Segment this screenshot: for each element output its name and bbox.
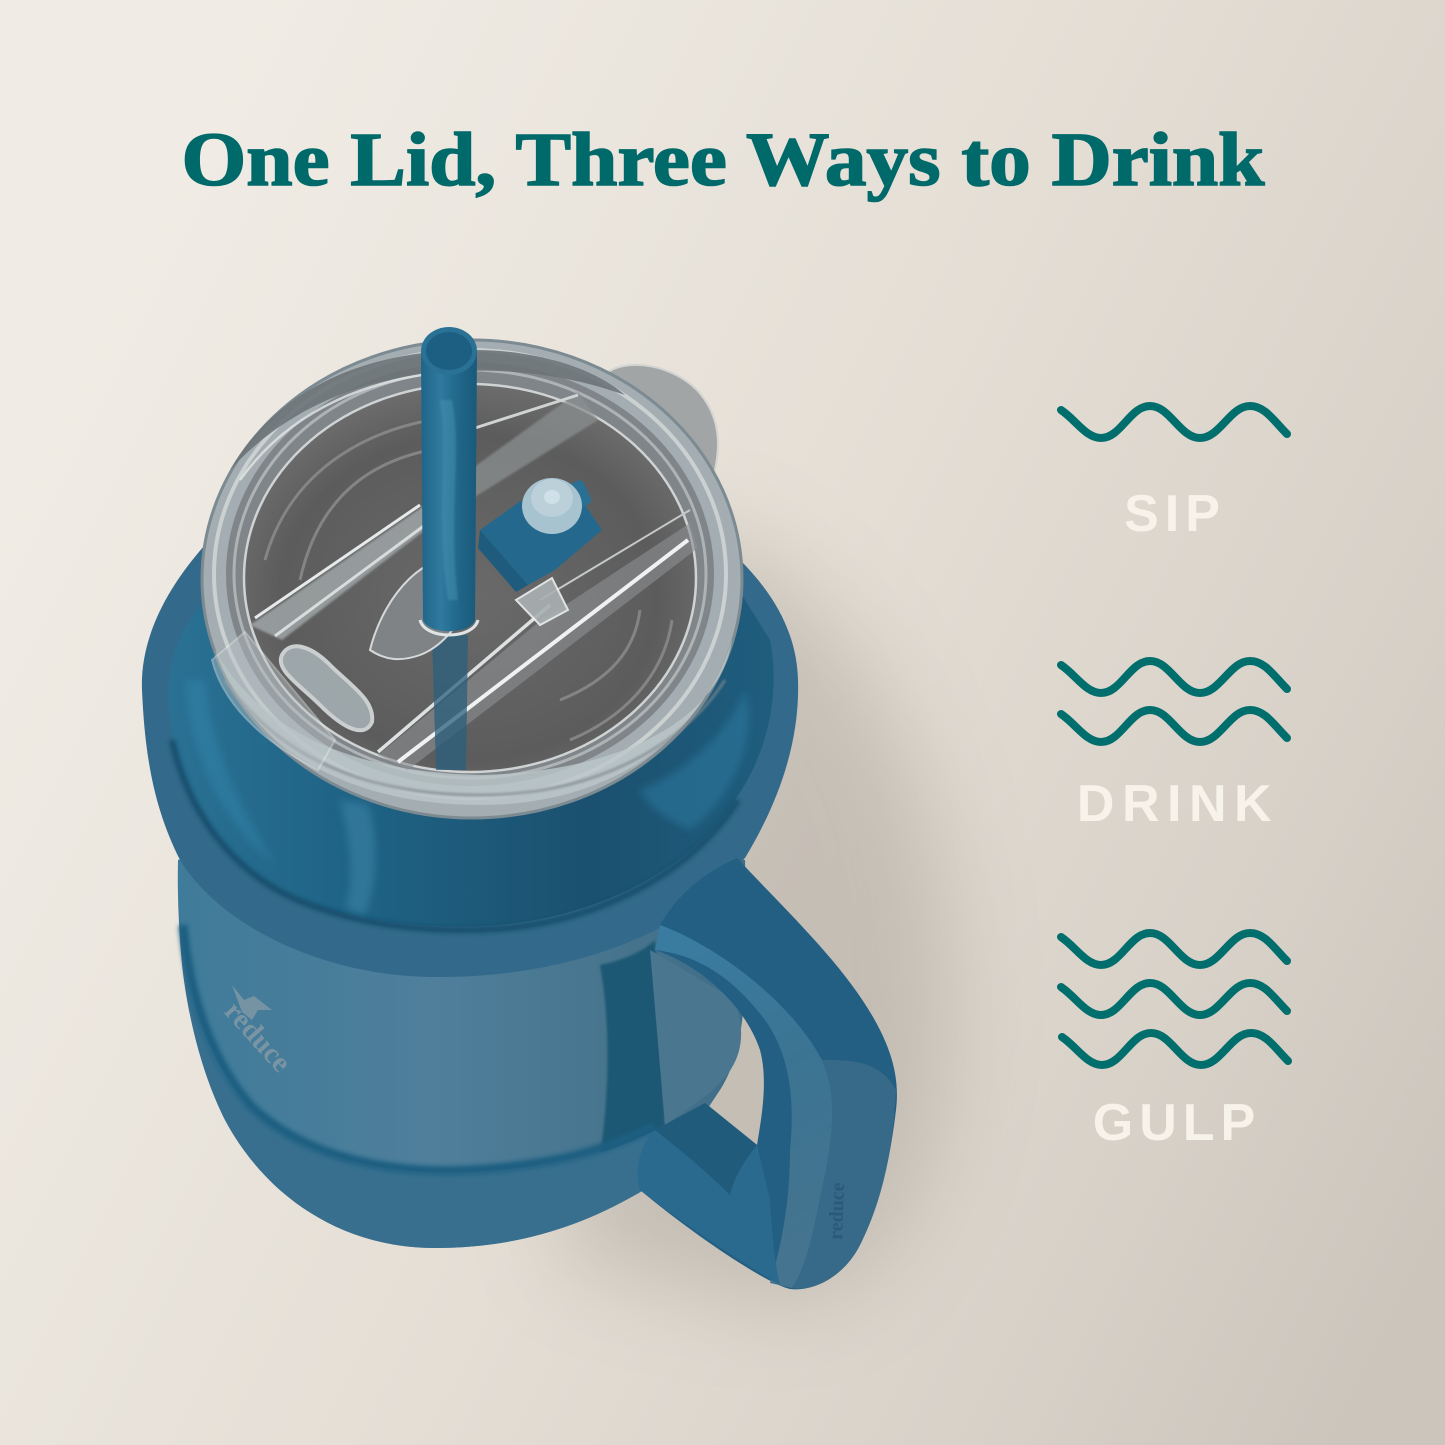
- collar: [142, 545, 798, 977]
- sip indicator: [1061, 406, 1287, 543]
- lid interior: [244, 384, 696, 772]
- logo mark: [232, 985, 272, 1020]
- lid outer rim: [202, 340, 742, 818]
- mug body: [178, 780, 746, 1248]
- label: sip: SIP: [1124, 485, 1226, 543]
- lid rim rings: [214, 350, 726, 798]
- upper sliding channel: [250, 505, 425, 640]
- handle lower arm: [638, 1103, 780, 1285]
- view through handle: [650, 950, 741, 1125]
- small post: [568, 479, 593, 509]
- front notch tab: [212, 632, 335, 770]
- handle matte side: [792, 1060, 896, 1289]
- dome highlight: [340, 800, 375, 915]
- handle front face: [655, 925, 832, 1288]
- mug cast shadow: [560, 520, 950, 1302]
- icon: three waves: [1061, 933, 1288, 1065]
- dome shine left: [185, 680, 275, 865]
- lid upper dark rim: [230, 350, 625, 470]
- lid side tab: [608, 365, 718, 478]
- icon: two waves: [1061, 661, 1287, 742]
- title: One Lid, Three Ways to Drink: [182, 118, 1265, 202]
- silicone plug: [522, 478, 582, 534]
- clear latch: [516, 578, 568, 625]
- icon: one wave: [1061, 406, 1287, 438]
- silicone stopper pad: [281, 646, 372, 730]
- mug: [142, 327, 897, 1289]
- lid: [202, 327, 742, 818]
- straw reflection: [432, 635, 468, 770]
- label: gulp: GULP: [1093, 1094, 1261, 1152]
- lower sliding channel: [378, 523, 698, 770]
- blue pivot tab: [480, 490, 602, 585]
- dome shine right: [640, 690, 749, 830]
- handle: [638, 858, 897, 1289]
- drink indicator: [1061, 661, 1287, 833]
- dome rim line: [172, 740, 738, 930]
- collar glossy dome: [168, 560, 774, 927]
- interior rings: [265, 415, 672, 740]
- body dark reflection: [600, 940, 665, 1155]
- gulp indicator: [1061, 933, 1288, 1152]
- logo on body: reduce: [218, 995, 297, 1079]
- straw collar oval: [370, 558, 472, 659]
- label: drink: DRINK: [1077, 775, 1279, 833]
- base band: [180, 915, 660, 1248]
- handle embossed text: reduce: [825, 1182, 849, 1240]
- straw: [420, 327, 478, 635]
- lid bottom glass: [215, 640, 732, 805]
